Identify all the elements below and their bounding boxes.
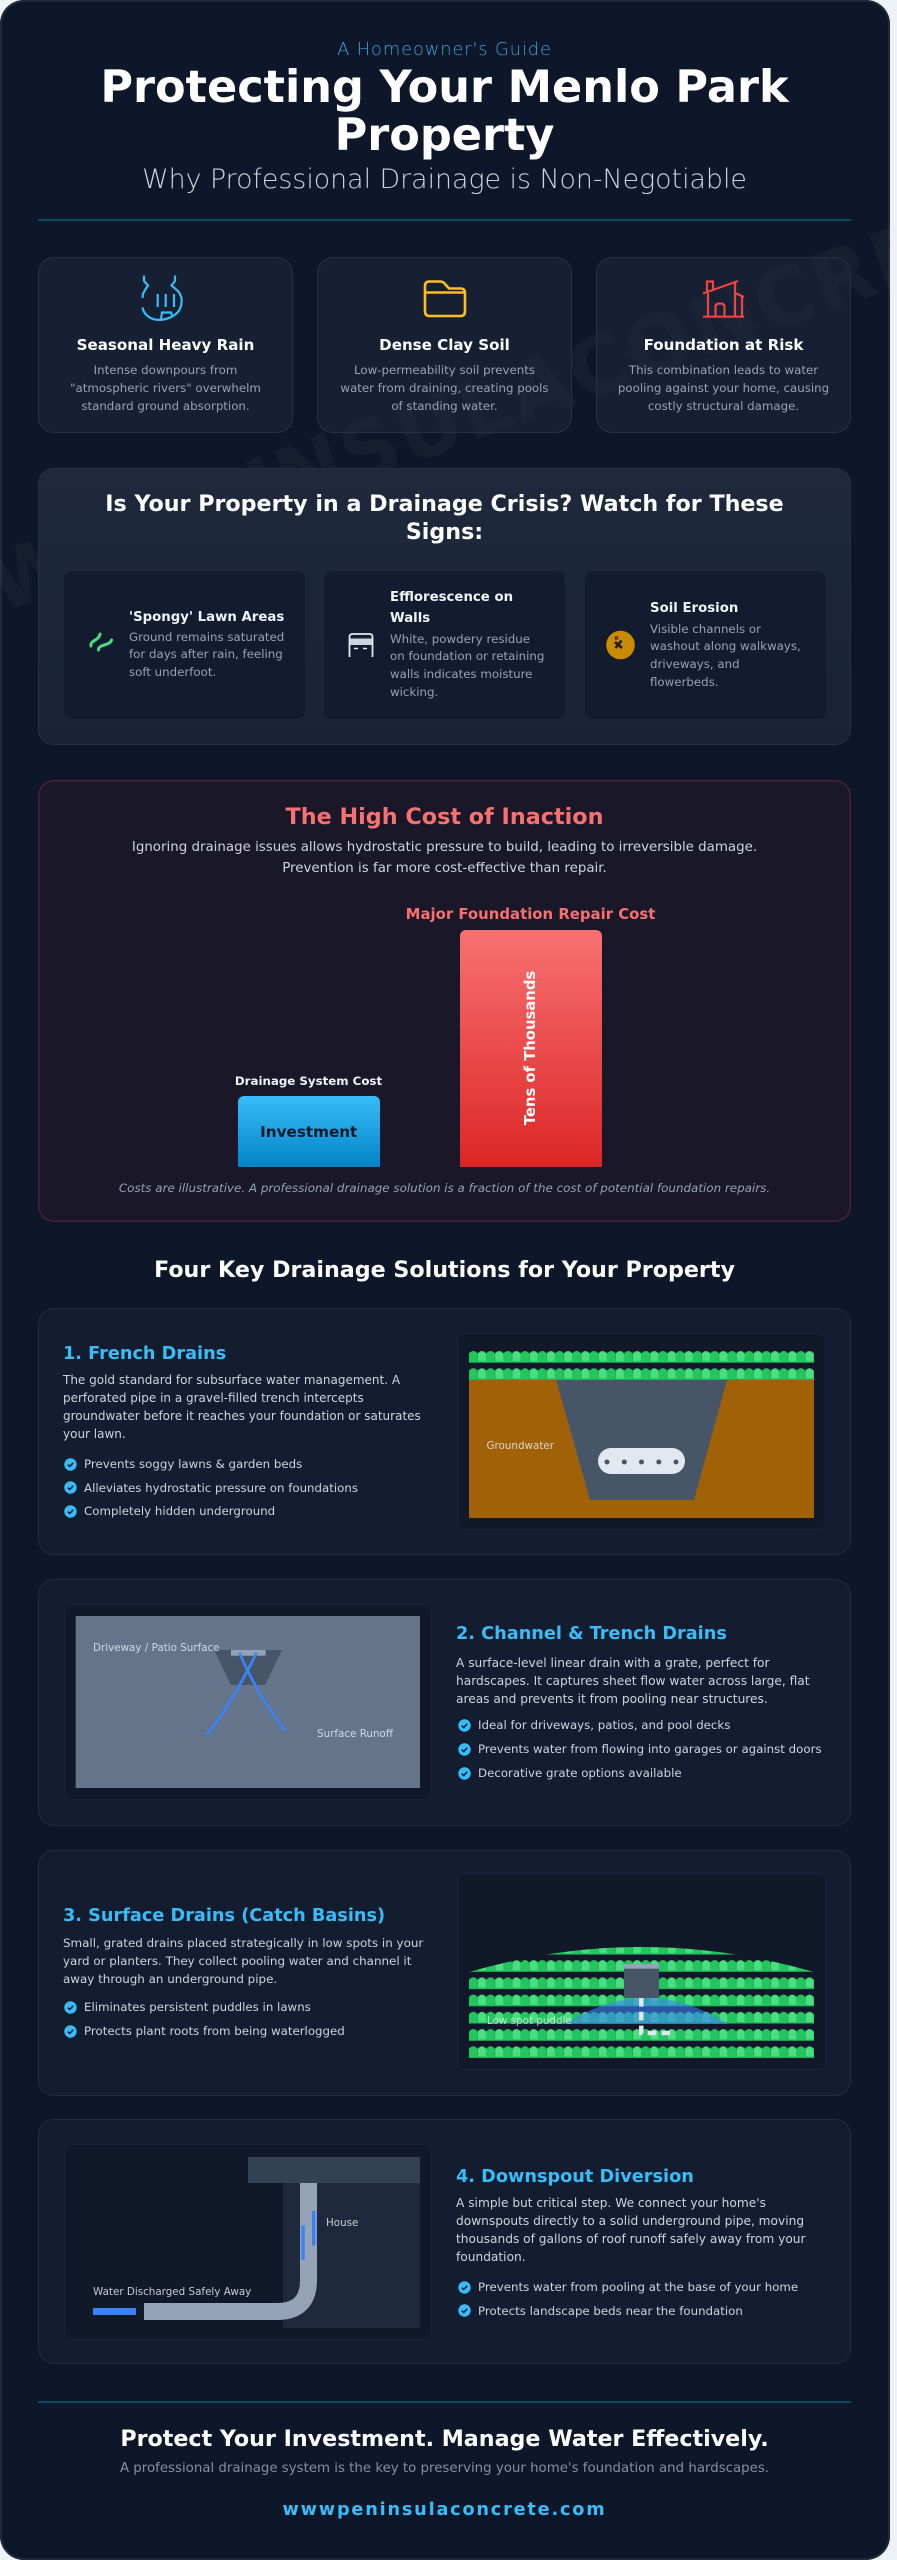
solution text: hardscapes. It captures sheet flow water across large, flat — [456, 1674, 810, 1688]
description — [132, 840, 757, 876]
title: Property — [335, 108, 554, 160]
grate — [231, 1650, 266, 1656]
sign: efflorescence — [324, 571, 565, 719]
water flow arrows — [207, 1654, 285, 1734]
benefit: Prevents water from pooling at the base of your home — [478, 2280, 798, 2294]
benefit: Completely hidden underground — [84, 1504, 275, 1518]
description — [340, 363, 549, 413]
sign heading — [390, 590, 513, 626]
heading: Dense Clay Soil — [379, 336, 510, 354]
icon: house — [702, 280, 744, 318]
sign: spongy lawn — [64, 571, 305, 719]
label: discharge: Water Discharged Safely Away — [93, 2286, 251, 2298]
catch basin — [624, 1964, 659, 1998]
description: Intense downpours from — [94, 363, 237, 377]
solution text — [456, 2196, 806, 2264]
bar value: drainage: Investment — [260, 1123, 357, 1141]
gravel trench — [556, 1380, 727, 1500]
diagram: downspout — [64, 2144, 432, 2340]
benefit: Alleviates hydrostatic pressure on foundations — [84, 1480, 358, 1494]
grass — [469, 1350, 814, 1380]
description: Ignoring drainage issues allows hydrostatic pressure to build, leading to irreversible damage. — [132, 840, 757, 855]
description: standard ground absorption. — [81, 399, 250, 413]
sign text: soft underfoot. — [129, 665, 216, 679]
description: of standing water. — [391, 399, 498, 413]
benefit: Prevents water from flowing into garages or against doors — [478, 1742, 822, 1756]
water flow — [93, 2211, 316, 2315]
diagram: channel drain — [64, 1604, 432, 1800]
panel: downspout diversion — [38, 2119, 851, 2364]
solution text: A simple but critical step. We connect your home's — [456, 2196, 766, 2210]
benefit: Protects plant roots from being waterlogged — [84, 2024, 345, 2038]
title: Protecting Your Menlo Park — [100, 61, 789, 113]
panel: surface drains — [38, 1850, 851, 2096]
label: puddle: Low spot puddle — [487, 2015, 572, 2027]
footer heading: Protect Your Investment. Manage Water Effectively. — [120, 2426, 769, 2452]
sign text: flowerbeds. — [650, 675, 719, 689]
solution text — [456, 1656, 810, 1706]
panel: dense clay soil — [317, 257, 572, 433]
description: Low-permeability soil prevents — [354, 363, 535, 377]
sign text: Visible channels or — [650, 622, 761, 636]
sign: soil erosion — [585, 571, 826, 719]
solution text: Small, grated drains placed strategically in low spots in your — [63, 1936, 423, 1950]
benefit: Ideal for driveways, patios, and pool decks — [478, 1718, 730, 1732]
footer text: A professional drainage system is the key to preserving your home's foundation and hardscapes. — [120, 2461, 769, 2476]
heading — [105, 491, 784, 544]
icon: folder — [424, 280, 466, 318]
label: driveway: Driveway / Patio Surface — [93, 1642, 220, 1654]
heading: Seasonal Heavy Rain — [77, 336, 254, 354]
driveway surface — [76, 1616, 420, 1788]
heading: Signs: — [406, 518, 483, 544]
solution text — [63, 1936, 424, 1986]
sign text: driveways, and — [650, 657, 740, 671]
benefit: Eliminates persistent puddles in lawns — [84, 2000, 311, 2014]
solution text: The gold standard for subsurface water management. A — [63, 1373, 400, 1387]
description: Prevention is far more cost-effective than repair. — [282, 861, 607, 876]
subtitle: Why Professional Drainage is Non-Negotiable — [142, 164, 747, 195]
solution heading: 4. Downspout Diversion — [456, 2167, 694, 2187]
icon: rain — [141, 276, 183, 321]
drain channel — [214, 1650, 282, 1685]
solution text: yard or planters. They collect pooling water and channel it — [63, 1954, 411, 1968]
bar chart — [235, 905, 656, 1167]
solution heading: 2. Channel & Trench Drains — [456, 1624, 727, 1644]
benefit: Decorative grate options available — [478, 1766, 682, 1780]
sign text — [129, 630, 284, 679]
sign text — [650, 622, 801, 689]
panel: channel and trench drains — [38, 1579, 851, 1826]
pipe — [144, 2183, 308, 2312]
underground pipe — [641, 1998, 671, 2033]
perforated pipe — [598, 1448, 685, 1474]
sign text: walls indicates moisture — [390, 667, 532, 681]
title — [100, 61, 790, 160]
lawn — [469, 1947, 814, 2058]
sign heading: Soil Erosion — [650, 600, 738, 616]
house — [283, 2183, 420, 2328]
solution text: away through an underground pipe. — [63, 1972, 277, 1986]
heading: The High Cost of Inaction — [286, 804, 603, 830]
panel: seasonal heavy rain — [38, 257, 293, 433]
sign heading: Walls — [390, 611, 430, 626]
solution text: A surface-level linear drain with a grate, perfect for — [456, 1656, 770, 1670]
icon: spongy lawn — [89, 632, 113, 652]
sign text — [390, 632, 544, 699]
sign text: wicking. — [390, 685, 438, 699]
label: drainage cost: Drainage System Cost — [235, 1074, 382, 1088]
heading: Is Your Property in a Drainage Crisis? Watch for These — [105, 491, 784, 517]
website: wwwpeninsulaconcrete.com — [283, 2500, 606, 2520]
solution heading: 1. French Drains — [63, 1344, 226, 1364]
section heading: Four Key Drainage Solutions for Your Property — [154, 1257, 735, 1283]
icon: erosion — [606, 630, 635, 660]
sign text: for days after rain, feeling — [129, 647, 283, 661]
description: "atmospheric rivers" overwhelm — [70, 381, 261, 395]
panel: drainage crisis signs — [38, 468, 851, 745]
panel: french drains — [38, 1308, 851, 1555]
bar: repair — [460, 930, 602, 1167]
label: repair cost: Major Foundation Repair Cost — [406, 905, 655, 923]
puddle — [565, 1998, 728, 2024]
sign heading: 'Spongy' Lawn Areas — [129, 610, 284, 625]
eyebrow: A Homeowner's Guide — [337, 39, 552, 60]
description — [70, 363, 261, 413]
label: house: House — [326, 2217, 358, 2229]
description: water from draining, creating pools — [340, 381, 549, 395]
footnote: Costs are illustrative. A professional drainage solution is a fraction of the cost of potential foundation repairs. — [119, 1181, 770, 1195]
solution text: perforated pipe in a gravel-filled trench intercepts — [63, 1391, 364, 1405]
solution text: areas and prevents it from pooling near structures. — [456, 1692, 768, 1706]
diagram: catch basin — [457, 1873, 827, 2070]
label: groundwater: Groundwater — [486, 1440, 555, 1452]
description: pooling against your home, causing — [618, 381, 829, 395]
soil — [469, 1380, 814, 1518]
description: costly structural damage. — [648, 399, 799, 413]
panel: foundation at risk — [596, 257, 851, 433]
label: runoff: Surface Runoff — [317, 1728, 394, 1740]
bar value: repair: Tens of Thousands — [522, 971, 539, 1125]
solution text: groundwater before it reaches your foundation or saturates — [63, 1409, 421, 1423]
solution text: foundation. — [456, 2250, 526, 2264]
solution text: thousands of gallons of roof runoff safely away from your — [456, 2232, 806, 2246]
sign text: on foundation or retaining — [390, 649, 544, 663]
description: This combination leads to water — [629, 363, 818, 377]
solution text — [62, 1373, 421, 1441]
roof — [248, 2157, 420, 2183]
sign text: White, powdery residue — [390, 632, 530, 646]
sign text: Ground remains saturated — [129, 630, 284, 644]
benefit: Prevents soggy lawns & garden beds — [84, 1457, 302, 1471]
panel: cost of inaction — [38, 780, 851, 1222]
solution text: downspouts directly to a solid underground pipe, moving — [456, 2214, 804, 2228]
sign text: washout along walkways, — [650, 639, 801, 653]
bar: drainage — [238, 1096, 380, 1167]
benefit: Protects landscape beds near the foundation — [478, 2304, 743, 2318]
solution heading: 3. Surface Drains (Catch Basins) — [63, 1906, 385, 1926]
heading: Foundation at Risk — [644, 336, 803, 354]
icon: wall — [348, 633, 374, 657]
description — [618, 363, 829, 413]
sign heading: Efflorescence on — [390, 590, 513, 605]
solution text: your lawn. — [63, 1427, 126, 1441]
diagram: french drain — [457, 1333, 826, 1530]
